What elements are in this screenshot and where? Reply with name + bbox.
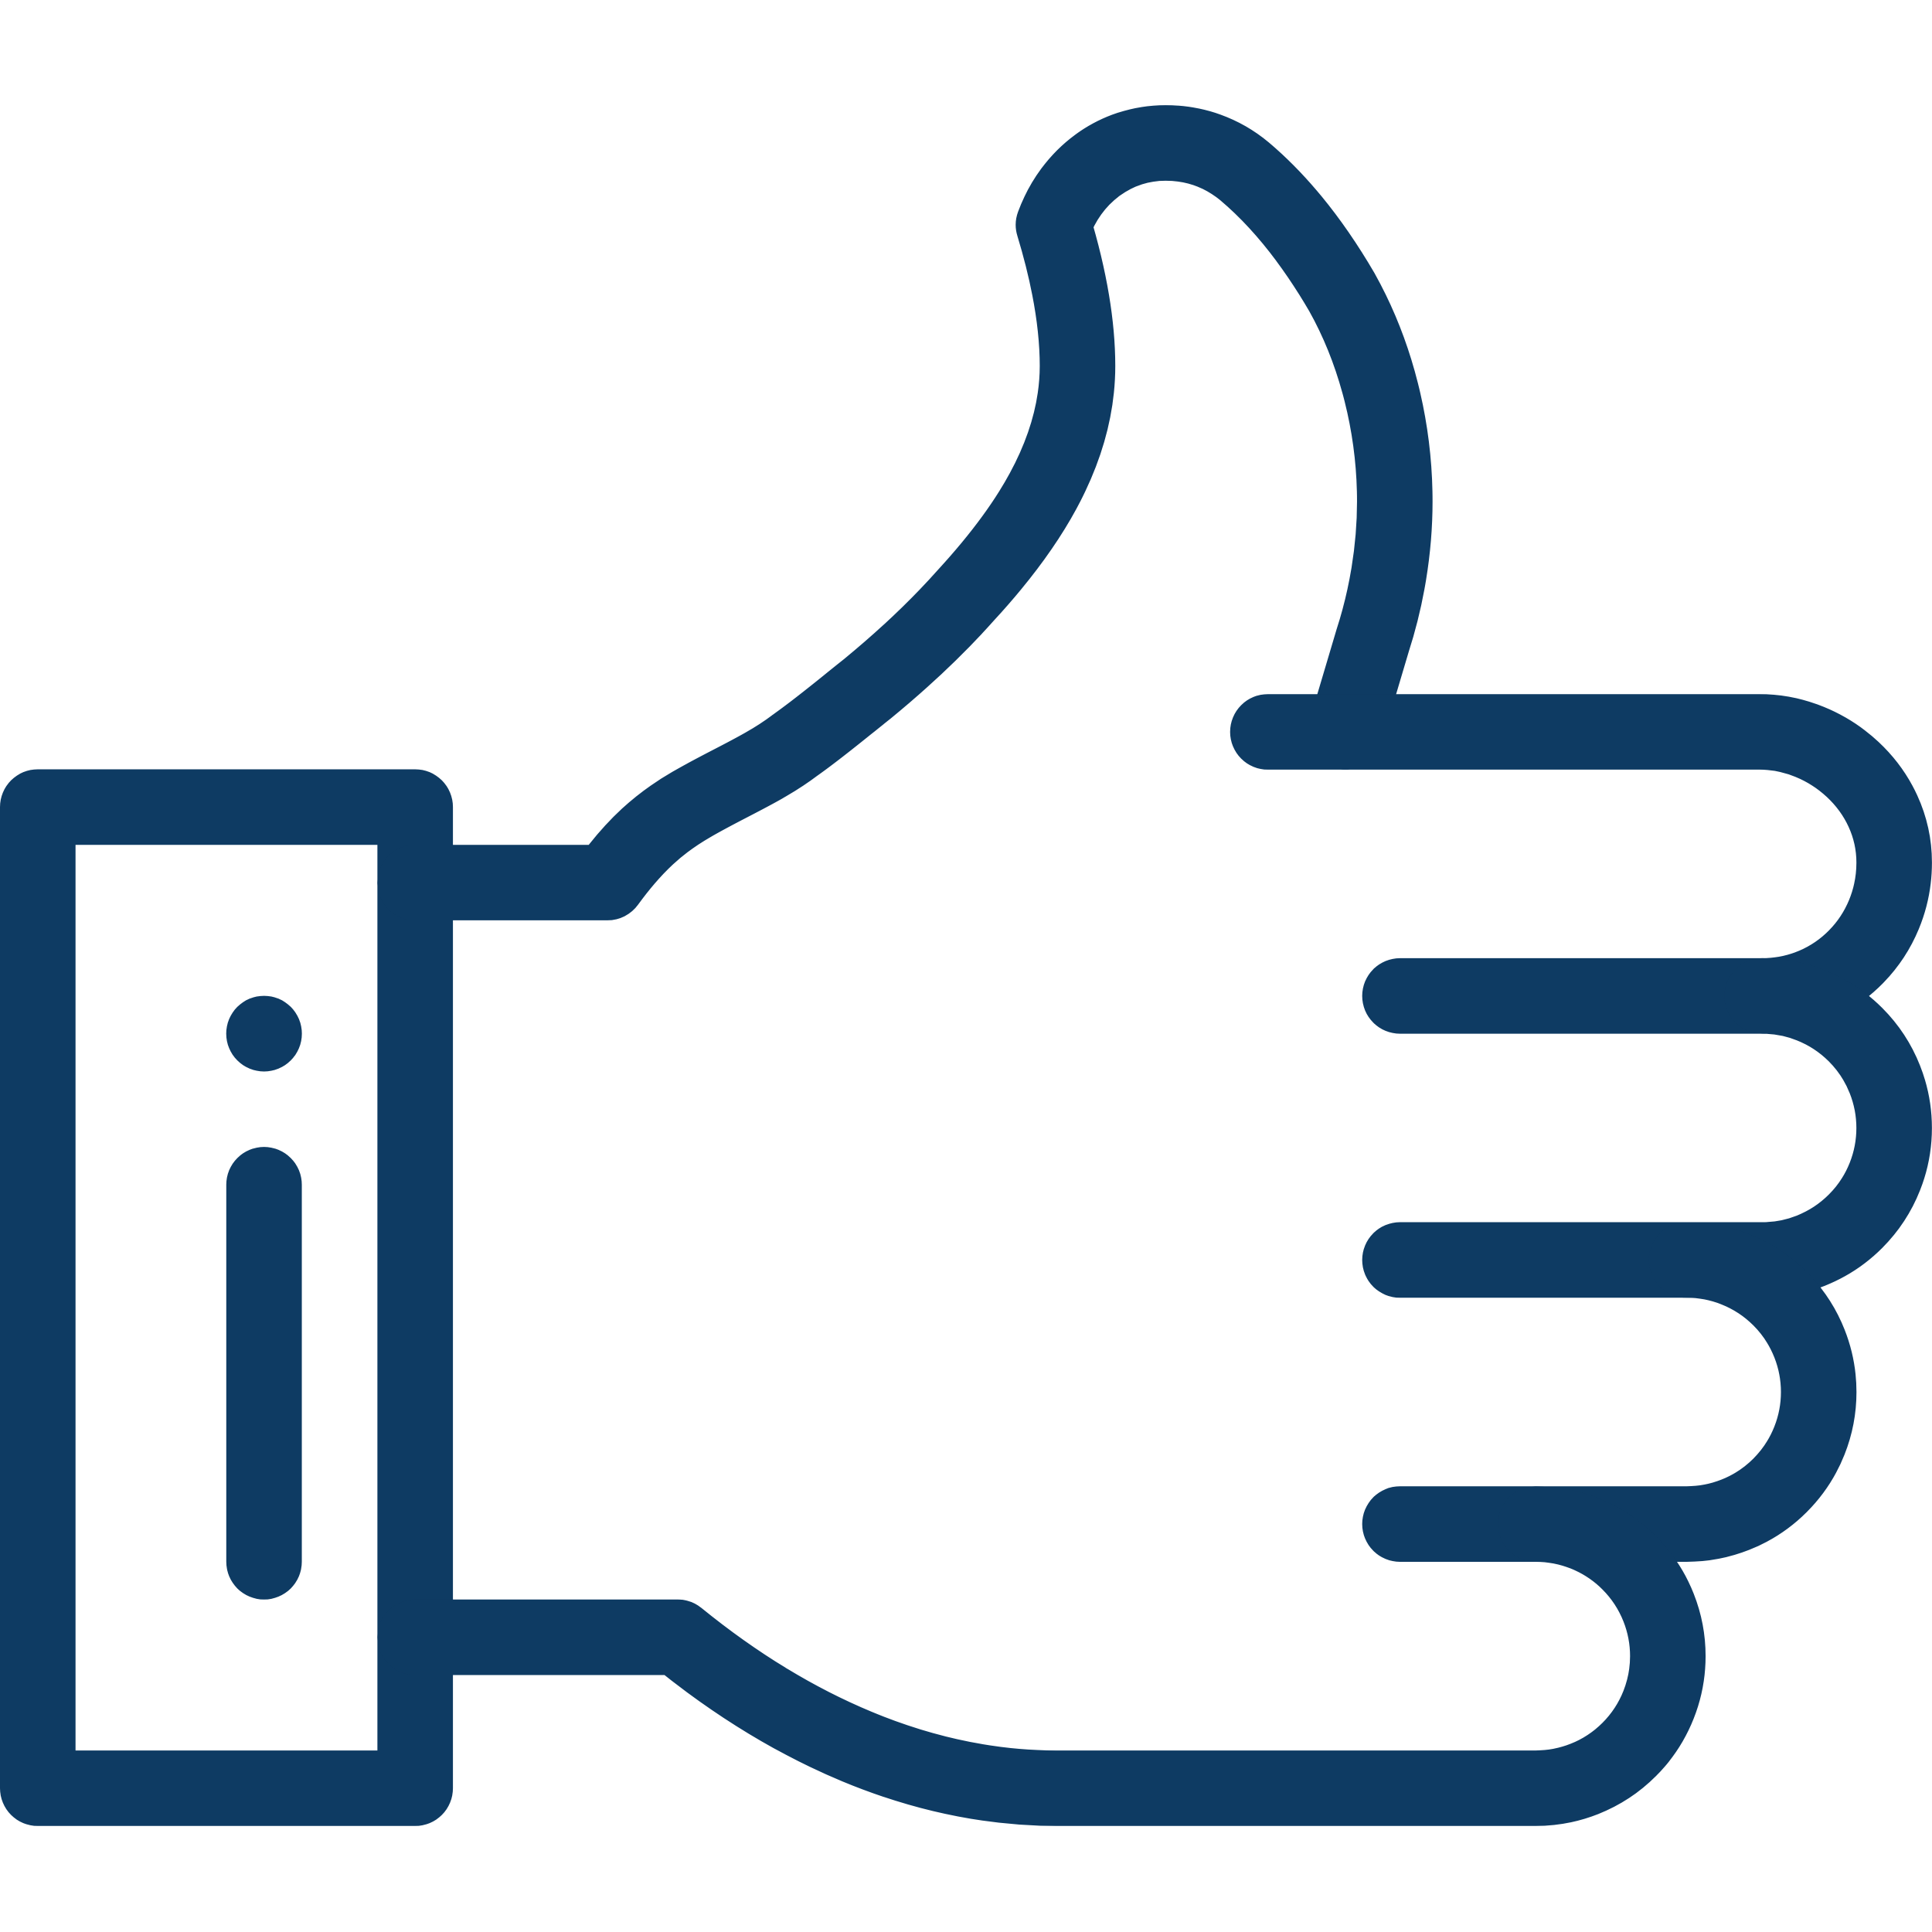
third finger	[1400, 1260, 1818, 1524]
cuff vertical bar	[240, 1185, 287, 1562]
first finger	[1268, 732, 1894, 996]
cuff rectangle	[38, 807, 415, 1788]
cuff button dot	[226, 996, 302, 1071]
thumb outline	[415, 143, 1395, 883]
fourth finger and palm base	[415, 1524, 1668, 1788]
second finger	[1400, 996, 1894, 1260]
